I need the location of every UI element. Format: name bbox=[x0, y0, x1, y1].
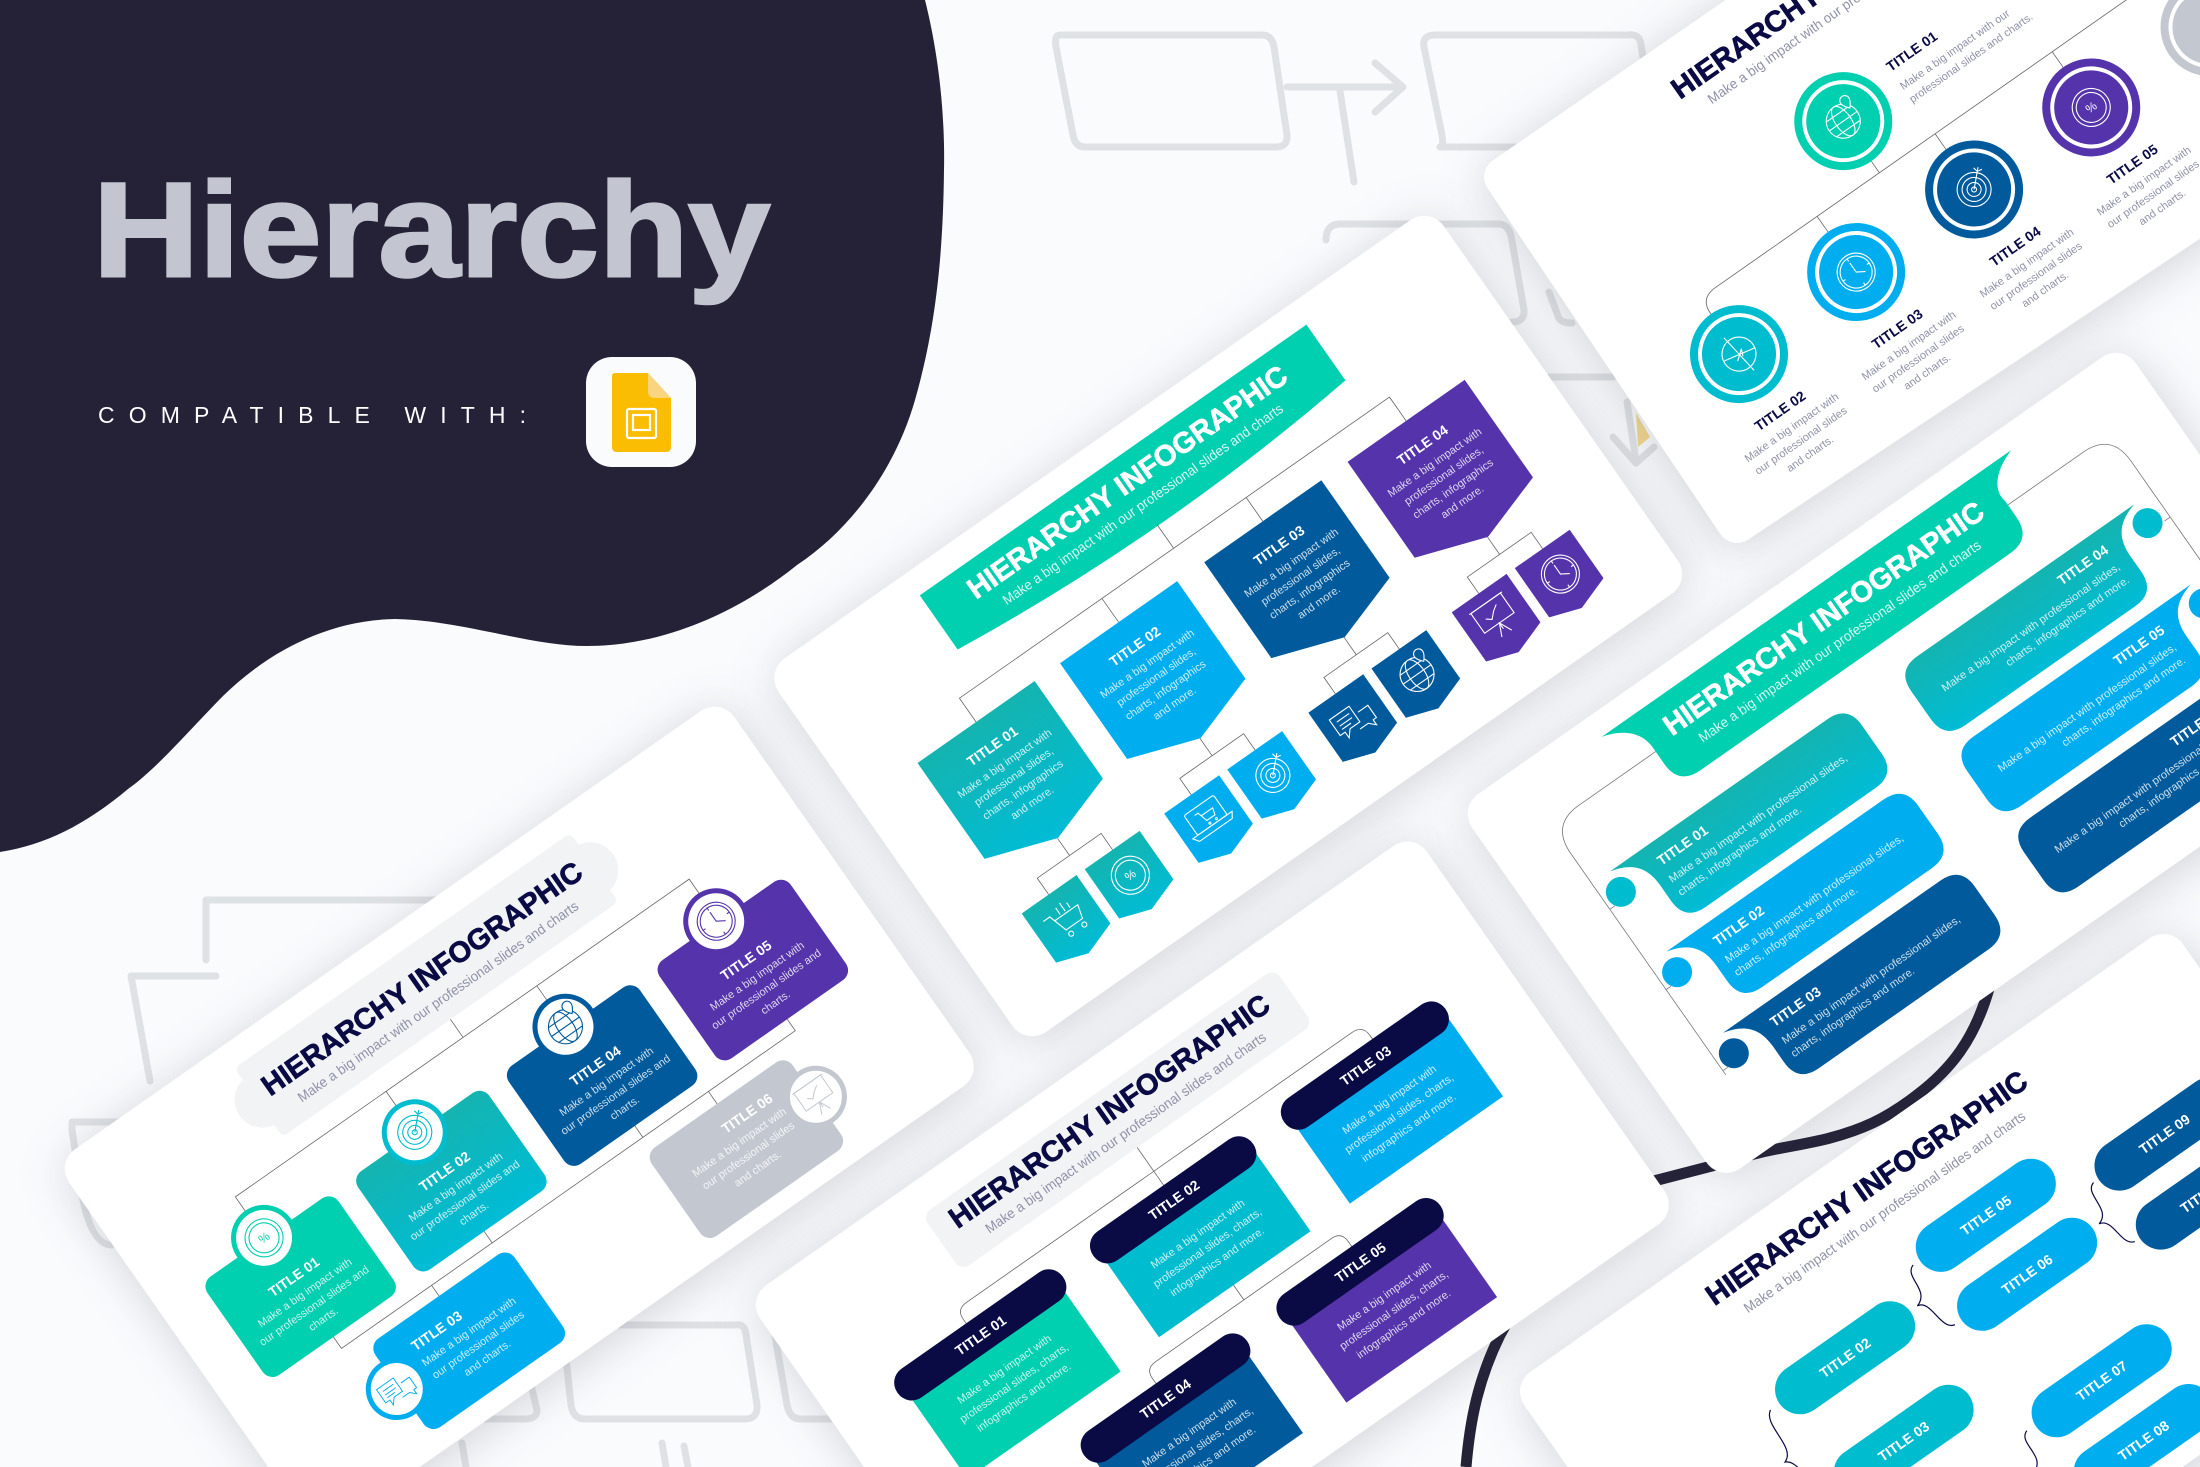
card: title 06: Make a big impact with bbox=[690, 1106, 789, 1180]
box: title 02: and more. bbox=[1151, 684, 1199, 723]
card: title 03 bbox=[342, 1248, 570, 1453]
main title: Hierarchy bbox=[93, 156, 770, 305]
box: title 02: Make a big impact with bbox=[1098, 627, 1197, 701]
box: title 01 bbox=[918, 681, 1116, 879]
connector lines bbox=[223, 861, 805, 1362]
pill: title 09: TITLE 09 bbox=[2136, 1111, 2193, 1157]
decorative background flowchart outlines bbox=[72, 35, 1650, 1467]
connector lines bbox=[940, 1001, 1464, 1454]
card: title 03: and charts. bbox=[462, 1338, 513, 1379]
circle: title 03: our professional slides bbox=[1870, 323, 1967, 395]
icon: laptop cart bbox=[1164, 775, 1260, 872]
box: title 02: professional slides, bbox=[1115, 646, 1198, 709]
circle: title 02: TITLE 02 bbox=[1751, 387, 1809, 434]
card: title 03: professional slides, charts, bbox=[1343, 1072, 1456, 1156]
card: title 02: our professional slides and bbox=[408, 1158, 522, 1243]
card: title 01: charts. bbox=[307, 1305, 341, 1334]
box: title 01: professional slides, bbox=[972, 745, 1056, 809]
circle: title 06 bbox=[2141, 0, 2200, 95]
circle: title 04: TITLE 04 bbox=[1987, 223, 2044, 270]
circle: title 05: % bbox=[2083, 98, 2100, 116]
card: title 01: % bbox=[256, 1229, 273, 1247]
box: title 01: Make a big impact with bbox=[956, 727, 1054, 801]
card: title 02: professional slides, charts, bbox=[1151, 1206, 1264, 1290]
ribbon: title 01: charts, infographics and more. bbox=[1676, 804, 1804, 899]
box: title 04 bbox=[1348, 380, 1546, 578]
box: title 03: TITLE 03 bbox=[1251, 522, 1308, 569]
card: title 04: TITLE 04 bbox=[567, 1042, 624, 1089]
heading: HIERARCHY INFOGRAPHIC bbox=[1700, 1065, 2034, 1312]
pill: title 02 bbox=[1765, 1291, 1925, 1424]
ribbon: title 01: TITLE 01 bbox=[1654, 822, 1711, 868]
box: title 04: professional slides, bbox=[1402, 444, 1486, 508]
card: title 01 bbox=[888, 1263, 1126, 1467]
box: title 03: and more. bbox=[1295, 583, 1343, 622]
ribbon: title 01 bbox=[1595, 705, 1896, 950]
card: title 01: infographics and more. bbox=[975, 1361, 1073, 1435]
brace connectors bbox=[1735, 1153, 2200, 1467]
card: title 02: Make a big impact with bbox=[407, 1151, 505, 1225]
circle: title 03 bbox=[1783, 199, 1977, 409]
card: title 06: our professional slides bbox=[700, 1119, 797, 1192]
box: title 03: Make a big impact with bbox=[1242, 526, 1341, 600]
subheading: Make a big impact with our professional slides and charts bbox=[1741, 1108, 2028, 1316]
ribbon: title 03: TITLE 03 bbox=[1767, 983, 1824, 1030]
pill: title 07 bbox=[2022, 1314, 2182, 1447]
ribbon: title 04: TITLE 04 bbox=[2054, 541, 2111, 588]
circle: title 02: and charts. bbox=[1785, 434, 1836, 475]
subheading: Make a big impact with our professional slides and charts bbox=[1695, 537, 1984, 745]
pill: title 02: TITLE 02 bbox=[1817, 1334, 1874, 1381]
ribbon: title 03 bbox=[1708, 866, 2009, 1112]
ribbon: title 02 bbox=[1652, 785, 1952, 1031]
ribbon: title 03: Make a big impact with professional slides, bbox=[1780, 914, 1963, 1047]
card: title 03: TITLE 03 bbox=[408, 1307, 465, 1354]
card: title 05: charts. bbox=[759, 988, 793, 1017]
circle: title 05: TITLE 05 bbox=[2104, 141, 2161, 187]
card: title 01 bbox=[181, 1164, 401, 1382]
ribbon: title 02: charts, infographics and more. bbox=[1732, 884, 1860, 979]
ribbon: title 05 bbox=[1953, 576, 2200, 820]
card: title 05: Make a big impact with bbox=[1335, 1260, 1434, 1334]
card: title 01: Make a big impact with bbox=[256, 1256, 355, 1330]
circle: title 02: Make a big impact with bbox=[1743, 391, 1841, 465]
box: title 03: professional slides, bbox=[1259, 545, 1343, 608]
heading: HIERARCHY INFOGRAPHIC bbox=[943, 989, 1276, 1235]
icon: target bbox=[1227, 731, 1323, 828]
ribbon: title 04 bbox=[1897, 496, 2195, 739]
card: title 04: TITLE 04 bbox=[1137, 1375, 1194, 1422]
circle: title 04: our professional slides bbox=[1988, 240, 2085, 313]
card: title 05: TITLE 05 bbox=[1332, 1239, 1389, 1286]
icon: percent bbox=[1085, 831, 1180, 927]
ribbon: title 05: charts, infographics and more. bbox=[2060, 655, 2188, 749]
pill: title 03: TITLE 03 bbox=[1875, 1418, 1932, 1465]
card: title 02 bbox=[332, 1058, 551, 1276]
card: title 05: infographics and more. bbox=[1355, 1287, 1453, 1361]
card: title 03: Make a big impact with bbox=[420, 1295, 519, 1369]
subheading: Make a big impact with our professional slides and charts bbox=[999, 400, 1286, 608]
icon: cart bbox=[1022, 875, 1117, 972]
card: title 06: TITLE 06 bbox=[718, 1090, 776, 1137]
circle: title 03: Make a big impact with bbox=[1860, 309, 1958, 383]
pill: title 05: TITLE 05 bbox=[1957, 1192, 2014, 1239]
ribbon: title 03: charts, infographics and more. bbox=[1789, 965, 1917, 1060]
card: title 05: Make a big impact with bbox=[708, 940, 807, 1014]
connector lines bbox=[910, 351, 1543, 895]
title banner bbox=[920, 325, 1352, 661]
box: title 04: TITLE 04 bbox=[1394, 421, 1451, 468]
connector lines bbox=[1692, 0, 2200, 314]
circle: title 05: our professional slides bbox=[2105, 158, 2200, 231]
panel: bottom-centre slide, header cards bbox=[746, 832, 1678, 1467]
icon: presentation board bbox=[1452, 574, 1547, 671]
circle: title 01: Make a big impact with our bbox=[1898, 7, 2012, 93]
ribbon: title 06 bbox=[2010, 666, 2200, 901]
circle: title 01: TITLE 01 bbox=[1883, 28, 1940, 75]
card: title 02: TITLE 02 bbox=[1145, 1177, 1203, 1223]
card: title 06: and charts. bbox=[732, 1149, 784, 1190]
panel: right slide, ribbon cards bbox=[1458, 343, 2200, 1182]
card: title 01: our professional slides and bbox=[257, 1264, 371, 1349]
dark blob header panel bbox=[0, 0, 944, 852]
card: title 03 bbox=[1274, 995, 1506, 1208]
icon: chat bbox=[1308, 674, 1404, 771]
card: title 01: Make a big impact with bbox=[955, 1333, 1054, 1407]
card: title 05: TITLE 05 bbox=[717, 937, 775, 983]
circle: title 01: professional slides and charts. bbox=[1907, 11, 2035, 106]
box: title 02 bbox=[1060, 581, 1259, 780]
circle: title 04 bbox=[1901, 117, 2095, 327]
pill: title 06: TITLE 06 bbox=[1999, 1251, 2056, 1298]
icon: google slides tile bbox=[586, 357, 696, 467]
card: title 03: Make a big impact with bbox=[1340, 1063, 1439, 1137]
heading: HIERARCHY INFOGRAPHIC bbox=[962, 360, 1294, 606]
circle: title 01 bbox=[1775, 0, 2047, 189]
box: title 02: TITLE 02 bbox=[1106, 623, 1163, 670]
pill: title 06 bbox=[1947, 1208, 2107, 1341]
title plate bbox=[216, 820, 637, 1150]
card: title 02: TITLE 02 bbox=[416, 1148, 473, 1195]
pill: title 05 bbox=[1906, 1149, 2066, 1282]
pill: title 10 bbox=[2126, 1127, 2200, 1259]
heading: HIERARCHY INFOGRAPHIC bbox=[256, 856, 589, 1102]
subheading: Make a big impact with our professional slides and charts bbox=[294, 898, 581, 1105]
pill: title 08 bbox=[2064, 1374, 2200, 1467]
card: title 02: charts. bbox=[457, 1199, 491, 1228]
card: title 05: professional slides, charts, bbox=[1338, 1268, 1451, 1353]
card: title 03: TITLE 03 bbox=[1337, 1042, 1394, 1089]
heading: HIERARCHY INFOGRAPHIC bbox=[1658, 496, 1991, 742]
circle: title 02 bbox=[1666, 281, 1860, 491]
card: title 04: charts. bbox=[608, 1094, 642, 1123]
card: title 02: infographics and more. bbox=[1168, 1225, 1267, 1299]
circle: title 04: Make a big impact with bbox=[1978, 226, 2076, 300]
box: title 04: charts, infographics bbox=[1411, 457, 1496, 521]
ribbon: title 04: charts, infographics and more. bbox=[2004, 574, 2132, 669]
ribbon: title 02: Make a big impact with professional slides, bbox=[1723, 833, 1906, 966]
box: title 04: and more. bbox=[1439, 483, 1486, 521]
box: title 01: and more. bbox=[1009, 784, 1056, 822]
card: title 01: TITLE 01 bbox=[265, 1253, 322, 1300]
card: title 01: TITLE 01 bbox=[952, 1312, 1009, 1359]
ribbon: title 02: TITLE 02 bbox=[1710, 902, 1767, 949]
card: title 05: our professional slides and bbox=[710, 947, 824, 1032]
pill: title 03 bbox=[1824, 1375, 1983, 1467]
card: title 01: professional slides, charts, bbox=[958, 1342, 1071, 1426]
ribbon banner bbox=[1601, 450, 2059, 806]
ribbon: title 05: TITLE 05 bbox=[2110, 622, 2167, 668]
subheading: Make a big impact with our professional slides and charts bbox=[982, 1029, 1269, 1236]
circle: title 05: and charts. bbox=[2137, 187, 2188, 228]
circle: title 02: our professional slides bbox=[1753, 405, 1850, 477]
compatible with label: COMPATIBLE WITH: bbox=[98, 402, 526, 428]
circle: title 05 bbox=[2018, 35, 2200, 245]
dark curve running behind slides bbox=[1466, 985, 1990, 1467]
card: title 05 bbox=[1270, 1191, 1502, 1406]
yellow fragment and checkmark behind slides bbox=[1613, 402, 1654, 463]
card: title 03: infographics and more. bbox=[1360, 1091, 1458, 1165]
ribbon: title 05: Make a big impact with professional slides, bbox=[1996, 642, 2179, 775]
card: title 03: our professional slides bbox=[430, 1309, 527, 1382]
ribbon: title 01: Make a big impact with professional slides, bbox=[1667, 752, 1850, 885]
circle: title 03: TITLE 03 bbox=[1869, 305, 1926, 352]
card: title 02 bbox=[1083, 1130, 1313, 1341]
icon: percent: % bbox=[1122, 866, 1139, 884]
card: title 04: Make a big impact with bbox=[557, 1045, 656, 1119]
circle: title 04: and charts. bbox=[2020, 269, 2071, 310]
panel: bottom-left slide, rounded cards bbox=[55, 697, 983, 1467]
pill: title 08: TITLE 08 bbox=[2115, 1417, 2172, 1464]
icon: globe bbox=[1371, 630, 1467, 727]
panel: bottom-right slide, pill tree bbox=[1511, 925, 2200, 1467]
ribbon: title 04: Make a big impact with professional slides, bbox=[1940, 561, 2123, 694]
box: title 01: charts, infographics bbox=[981, 758, 1066, 823]
panel: slide top right, circle hierarchy bbox=[1504, 0, 2200, 523]
box: title 02: charts, infographics bbox=[1123, 658, 1209, 723]
pill: title 09 bbox=[2085, 1068, 2200, 1200]
card: title 04: our professional slides and bbox=[559, 1053, 673, 1138]
card: title 06 bbox=[645, 1037, 874, 1243]
panel: centre slide, pentagon hierarchy bbox=[765, 206, 1691, 1046]
card: title 05 bbox=[633, 847, 853, 1065]
card: title 02: Make a big impact with bbox=[1149, 1197, 1247, 1271]
card: title 04 bbox=[483, 953, 702, 1171]
box: title 03 bbox=[1204, 480, 1403, 679]
circle: title 03: and charts. bbox=[1902, 352, 1953, 393]
circle: title 05: Make a big impact with bbox=[2095, 144, 2194, 218]
icon: clock bbox=[1515, 530, 1610, 626]
frame connector lines bbox=[1551, 433, 2200, 1075]
pill: title 07: TITLE 07 bbox=[2073, 1357, 2130, 1404]
box: title 01: TITLE 01 bbox=[964, 723, 1021, 769]
box: title 03: charts, infographics bbox=[1267, 557, 1353, 622]
box: title 04: Make a big impact with bbox=[1386, 426, 1484, 500]
card: title 04 bbox=[1074, 1327, 1309, 1467]
title plate bbox=[922, 968, 1313, 1271]
